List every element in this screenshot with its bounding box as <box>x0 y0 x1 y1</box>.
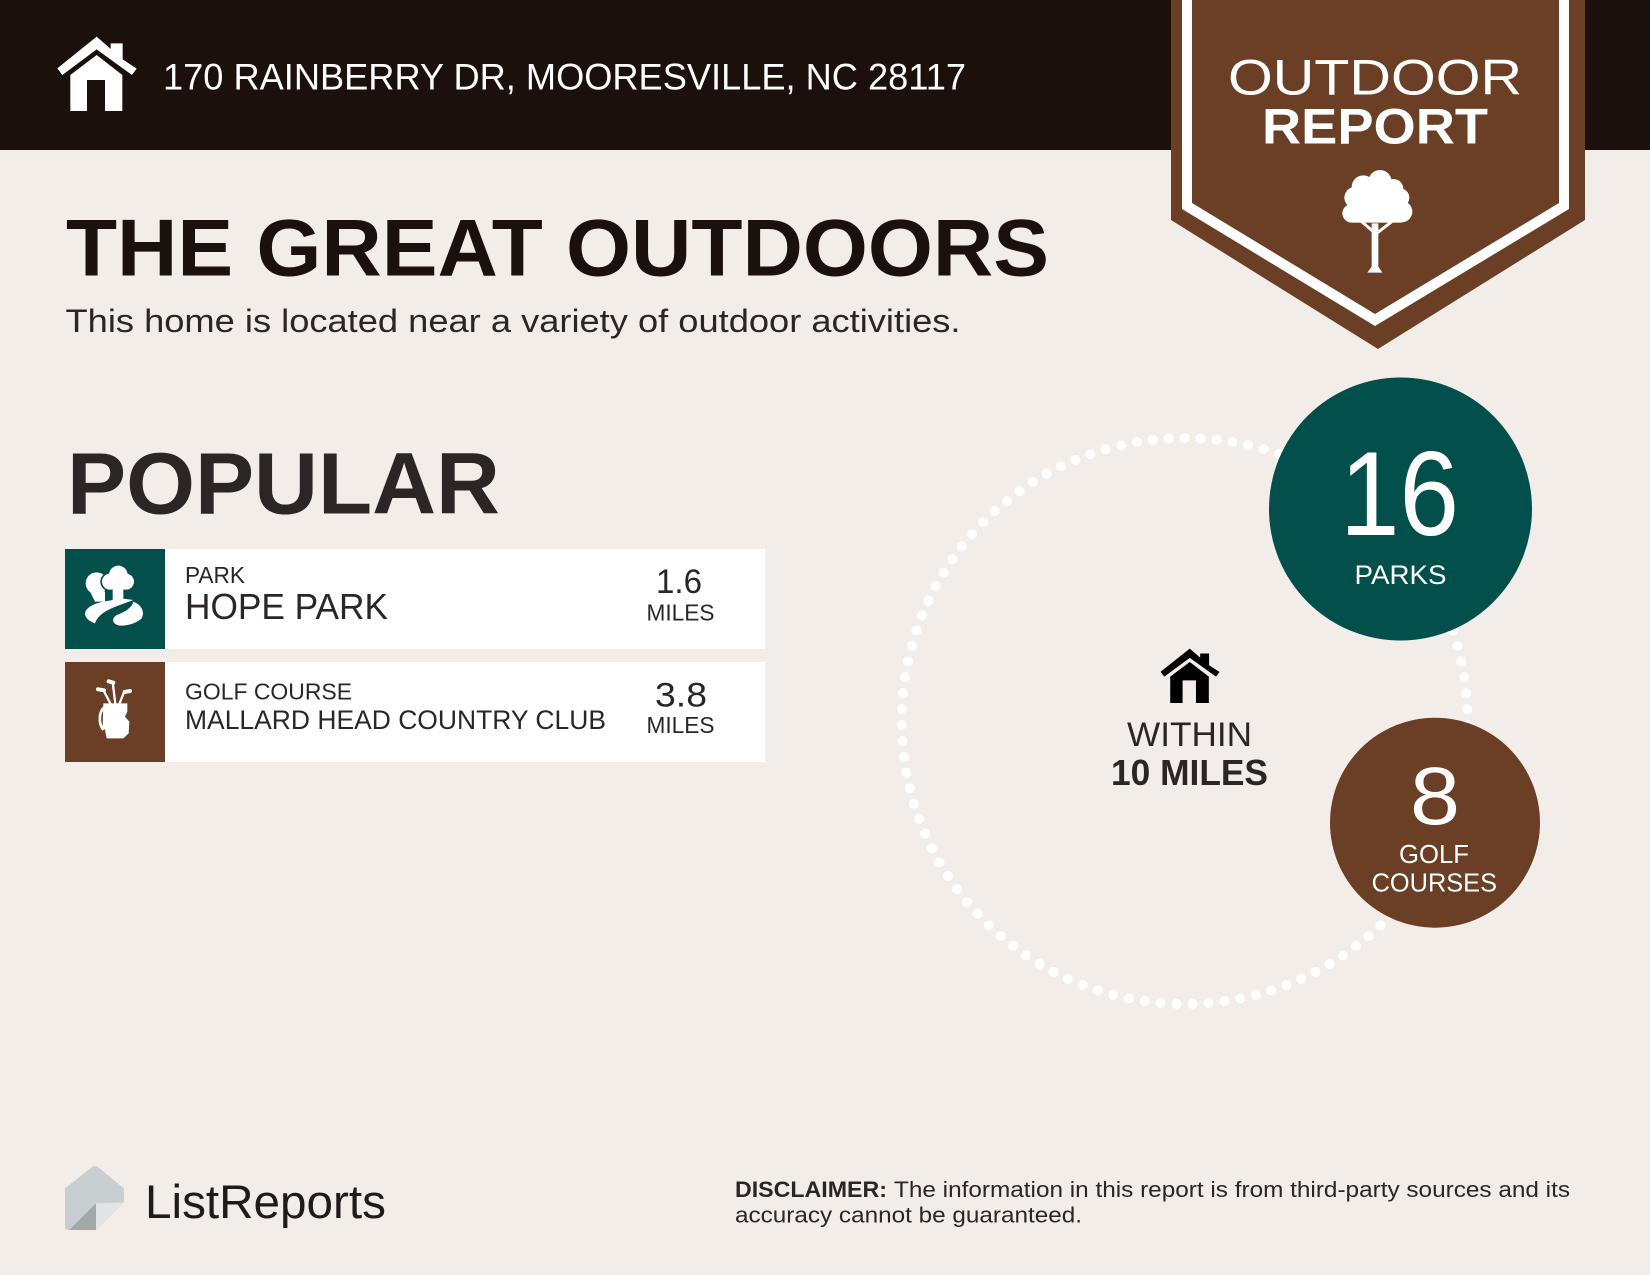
icon: header house <box>57 37 137 111</box>
main heading: THE GREAT OUTDOORS <box>66 204 1049 294</box>
header bar <box>0 0 1650 150</box>
radius diagram <box>902 378 1540 1004</box>
disclaimer <box>735 1177 1570 1228</box>
property address: 170 RAINBERRY DR, MOORESVILLE, NC 28117 <box>163 56 966 98</box>
stat: parks <box>1269 378 1532 640</box>
badge title: report: REPORT <box>1262 98 1488 154</box>
badge: outdoor report <box>1171 0 1585 349</box>
stat: parks: PARKS <box>1354 560 1446 590</box>
golf distance: 3.8 <box>655 677 707 715</box>
stat: parks: 16 <box>1340 427 1459 561</box>
icon: logo mark <box>65 1166 124 1230</box>
icon: tree <box>1342 170 1412 273</box>
radius label <box>1111 716 1268 793</box>
stat: golf courses: COURSES <box>1372 868 1497 898</box>
disclaimer: accuracy cannot be guaranteed. <box>735 1203 1082 1228</box>
stat: golf courses: 8 <box>1410 751 1460 842</box>
row: park <box>65 549 765 649</box>
park distance: 1.6 <box>656 563 702 601</box>
park label: PARK <box>185 562 246 588</box>
subheading: This home is located near a variety of outdoor activities. <box>66 303 960 339</box>
section heading: popular: POPULAR <box>67 436 500 533</box>
park distance unit: MILES <box>646 600 714 626</box>
golf distance unit: MILES <box>646 712 714 738</box>
park name: HOPE PARK <box>185 586 388 627</box>
icon: center house <box>1161 649 1219 703</box>
icon: golf bag <box>98 681 130 738</box>
icon: park <box>85 566 143 626</box>
logo: ListReports <box>65 1166 386 1230</box>
disclaimer: The information in this report is from third-party sources and its <box>894 1177 1570 1202</box>
radius label: WITHIN <box>1127 716 1252 754</box>
badge title: outdoor: OUTDOOR <box>1228 50 1522 106</box>
disclaimer: DISCLAIMER: <box>735 1177 887 1202</box>
logo wordmark: ListReports <box>145 1175 386 1228</box>
stat: golf courses <box>1330 718 1540 928</box>
dotted radius ring <box>902 438 1468 1004</box>
golf course name: MALLARD HEAD COUNTRY CLUB <box>185 705 606 735</box>
radius label: 10 MILES <box>1111 752 1268 793</box>
stat: golf courses: GOLF <box>1399 839 1469 869</box>
row: golf course <box>65 662 765 762</box>
golf label: GOLF COURSE <box>185 678 352 704</box>
